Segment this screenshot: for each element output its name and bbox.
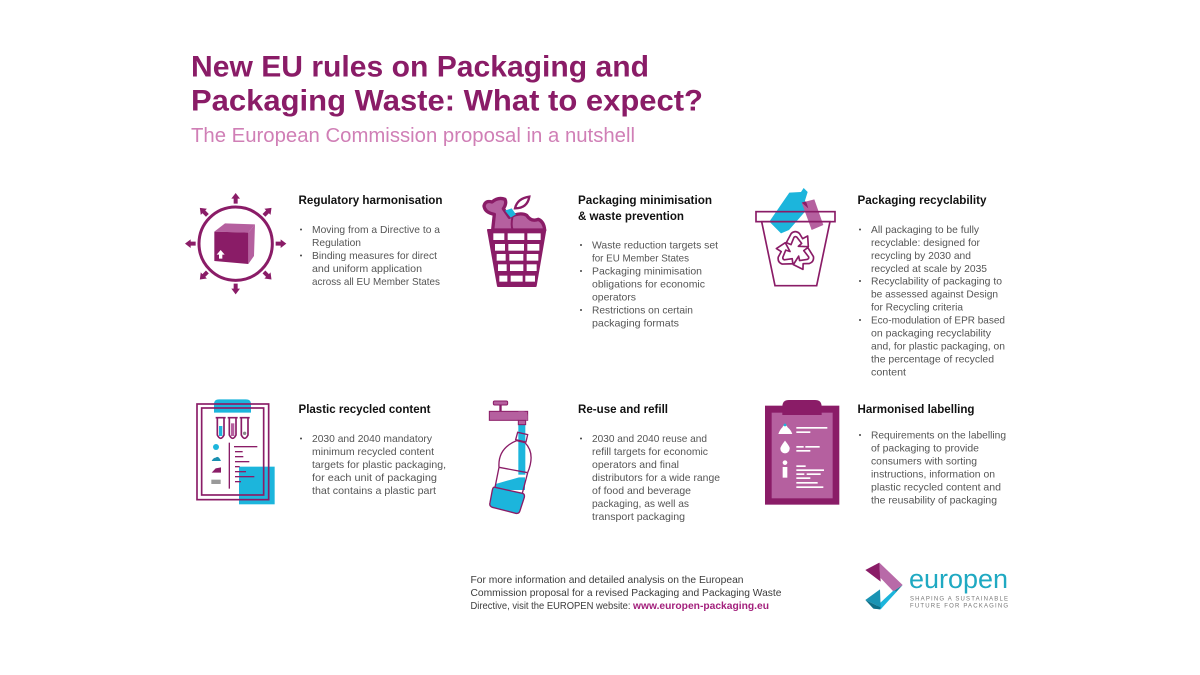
title: New EU rules on Packaging and bbox=[191, 50, 649, 84]
panel: packaging minimisation: operators bbox=[592, 292, 636, 304]
panel: harmonised labelling: the reusability of packaging bbox=[871, 494, 997, 506]
panel: packaging minimisation: obligations for economic bbox=[592, 278, 705, 290]
panel: plastic recycled content: minimum recycled content bbox=[312, 446, 434, 458]
panel: re-use and refill bbox=[578, 402, 720, 523]
panel: packaging recyclability: content bbox=[871, 366, 906, 378]
panel: harmonised labelling: of packaging to provide bbox=[871, 442, 979, 454]
panel: plastic recycled content: Plastic recycled content bbox=[298, 402, 431, 416]
logo: europen: FUTURE FOR PACKAGING bbox=[910, 604, 1008, 610]
icon: recycled content clipboard bbox=[197, 399, 275, 504]
panel: packaging minimisation: Waste reduction targets set bbox=[592, 240, 718, 252]
panel: harmonised labelling: consumers with sorting bbox=[871, 456, 977, 468]
panel: re-use and refill: of food and beverage bbox=[592, 485, 691, 497]
panel: re-use and refill: transport packaging bbox=[592, 511, 685, 523]
icon: tap and bottle bbox=[489, 401, 531, 513]
panel: regulatory harmonisation: Binding measures for direct bbox=[312, 250, 437, 262]
icon: recycling bin bbox=[756, 188, 835, 286]
panel: harmonised labelling: instructions, information on bbox=[871, 468, 995, 480]
panel: packaging recyclability: recyclable: designed for bbox=[871, 237, 980, 249]
footer note: Directive, visit the EUROPEN website: bbox=[470, 600, 630, 612]
footer note: Commission proposal for a revised Packaging and Packaging Waste bbox=[470, 587, 782, 599]
panel: regulatory harmonisation: Moving from a Directive to a bbox=[312, 224, 440, 236]
panel: packaging recyclability: the percentage of recycled bbox=[871, 354, 994, 366]
panel: packaging recyclability: be assessed against Design bbox=[871, 288, 998, 300]
footer note bbox=[470, 574, 782, 612]
panel: packaging recyclability: recycled at scale by 2035 bbox=[871, 263, 987, 275]
panel: harmonised labelling: Requirements on the labelling bbox=[871, 430, 1006, 442]
panel: packaging recyclability bbox=[858, 193, 1005, 378]
title: Packaging Waste: What to expect? bbox=[191, 84, 703, 118]
icon: waste basket bbox=[484, 197, 545, 286]
panel: re-use and refill: distributors for a wide range bbox=[592, 472, 720, 484]
panel: plastic recycled content: that contains a plastic part bbox=[312, 485, 436, 497]
panel: packaging minimisation: Packaging minimisation bbox=[578, 193, 712, 207]
panel: packaging recyclability: for Recycling criteria bbox=[871, 302, 963, 314]
panel: packaging recyclability: and, for plastic packaging, on bbox=[871, 340, 1005, 352]
panel: re-use and refill: 2030 and 2040 reuse and bbox=[592, 433, 707, 445]
panel: harmonised labelling: plastic recycled content and bbox=[871, 482, 1001, 494]
panel: plastic recycled content: for each unit of packaging bbox=[312, 472, 437, 484]
panel: harmonised labelling bbox=[858, 402, 1006, 506]
panel: packaging minimisation: Packaging minimisation bbox=[592, 266, 702, 278]
panel: packaging recyclability: Eco-modulation of EPR based bbox=[871, 314, 1005, 326]
panel: plastic recycled content: targets for plastic packaging, bbox=[312, 459, 446, 471]
title bbox=[191, 50, 703, 118]
panel: packaging recyclability: recycling by 2030 and bbox=[871, 250, 971, 262]
panel: re-use and refill: Re-use and refill bbox=[578, 402, 668, 416]
panel: packaging minimisation bbox=[578, 193, 718, 330]
panel: re-use and refill: packaging, as well as bbox=[592, 498, 689, 510]
panel: packaging recyclability: All packaging to be fully bbox=[871, 224, 980, 236]
panel: regulatory harmonisation bbox=[298, 193, 442, 288]
logo: europen: SHAPING A SUSTAINABLE bbox=[910, 596, 1008, 602]
icon: box with outward arrows bbox=[185, 193, 286, 294]
footer note: For more information and detailed analysis on the European bbox=[470, 574, 744, 586]
panel: packaging minimisation: packaging formats bbox=[592, 318, 679, 330]
subtitle: The European Commission proposal in a nutshell bbox=[191, 125, 635, 147]
panel: regulatory harmonisation: Regulatory harmonisation bbox=[298, 193, 442, 207]
panel: regulatory harmonisation: across all EU Member States bbox=[312, 276, 440, 288]
panel: packaging minimisation: Restrictions on certain bbox=[592, 304, 693, 316]
panel: regulatory harmonisation: Regulation bbox=[312, 237, 361, 249]
panel: packaging recyclability: Packaging recyclability bbox=[858, 193, 987, 207]
logo: europen bbox=[865, 563, 1008, 610]
panel: packaging minimisation: for EU Member States bbox=[592, 252, 689, 264]
panel: packaging recyclability: Recyclability of packaging to bbox=[871, 276, 1002, 288]
panel: re-use and refill: operators and final bbox=[592, 459, 679, 471]
panel: packaging minimisation: & waste prevention bbox=[578, 209, 684, 223]
panel: plastic recycled content: 2030 and 2040 mandatory bbox=[312, 433, 433, 445]
footer note: www.europen-packaging.eu bbox=[632, 600, 769, 612]
logo: europen: europen bbox=[909, 564, 1008, 594]
panel: re-use and refill: refill targets for economic bbox=[592, 446, 708, 458]
icon: labelling clipboard bbox=[765, 400, 839, 505]
panel: packaging recyclability: on packaging recyclability bbox=[871, 328, 992, 340]
panel: plastic recycled content bbox=[298, 402, 446, 497]
panel: harmonised labelling: Harmonised labelling bbox=[858, 402, 974, 416]
panel: regulatory harmonisation: and uniform application bbox=[312, 263, 422, 275]
